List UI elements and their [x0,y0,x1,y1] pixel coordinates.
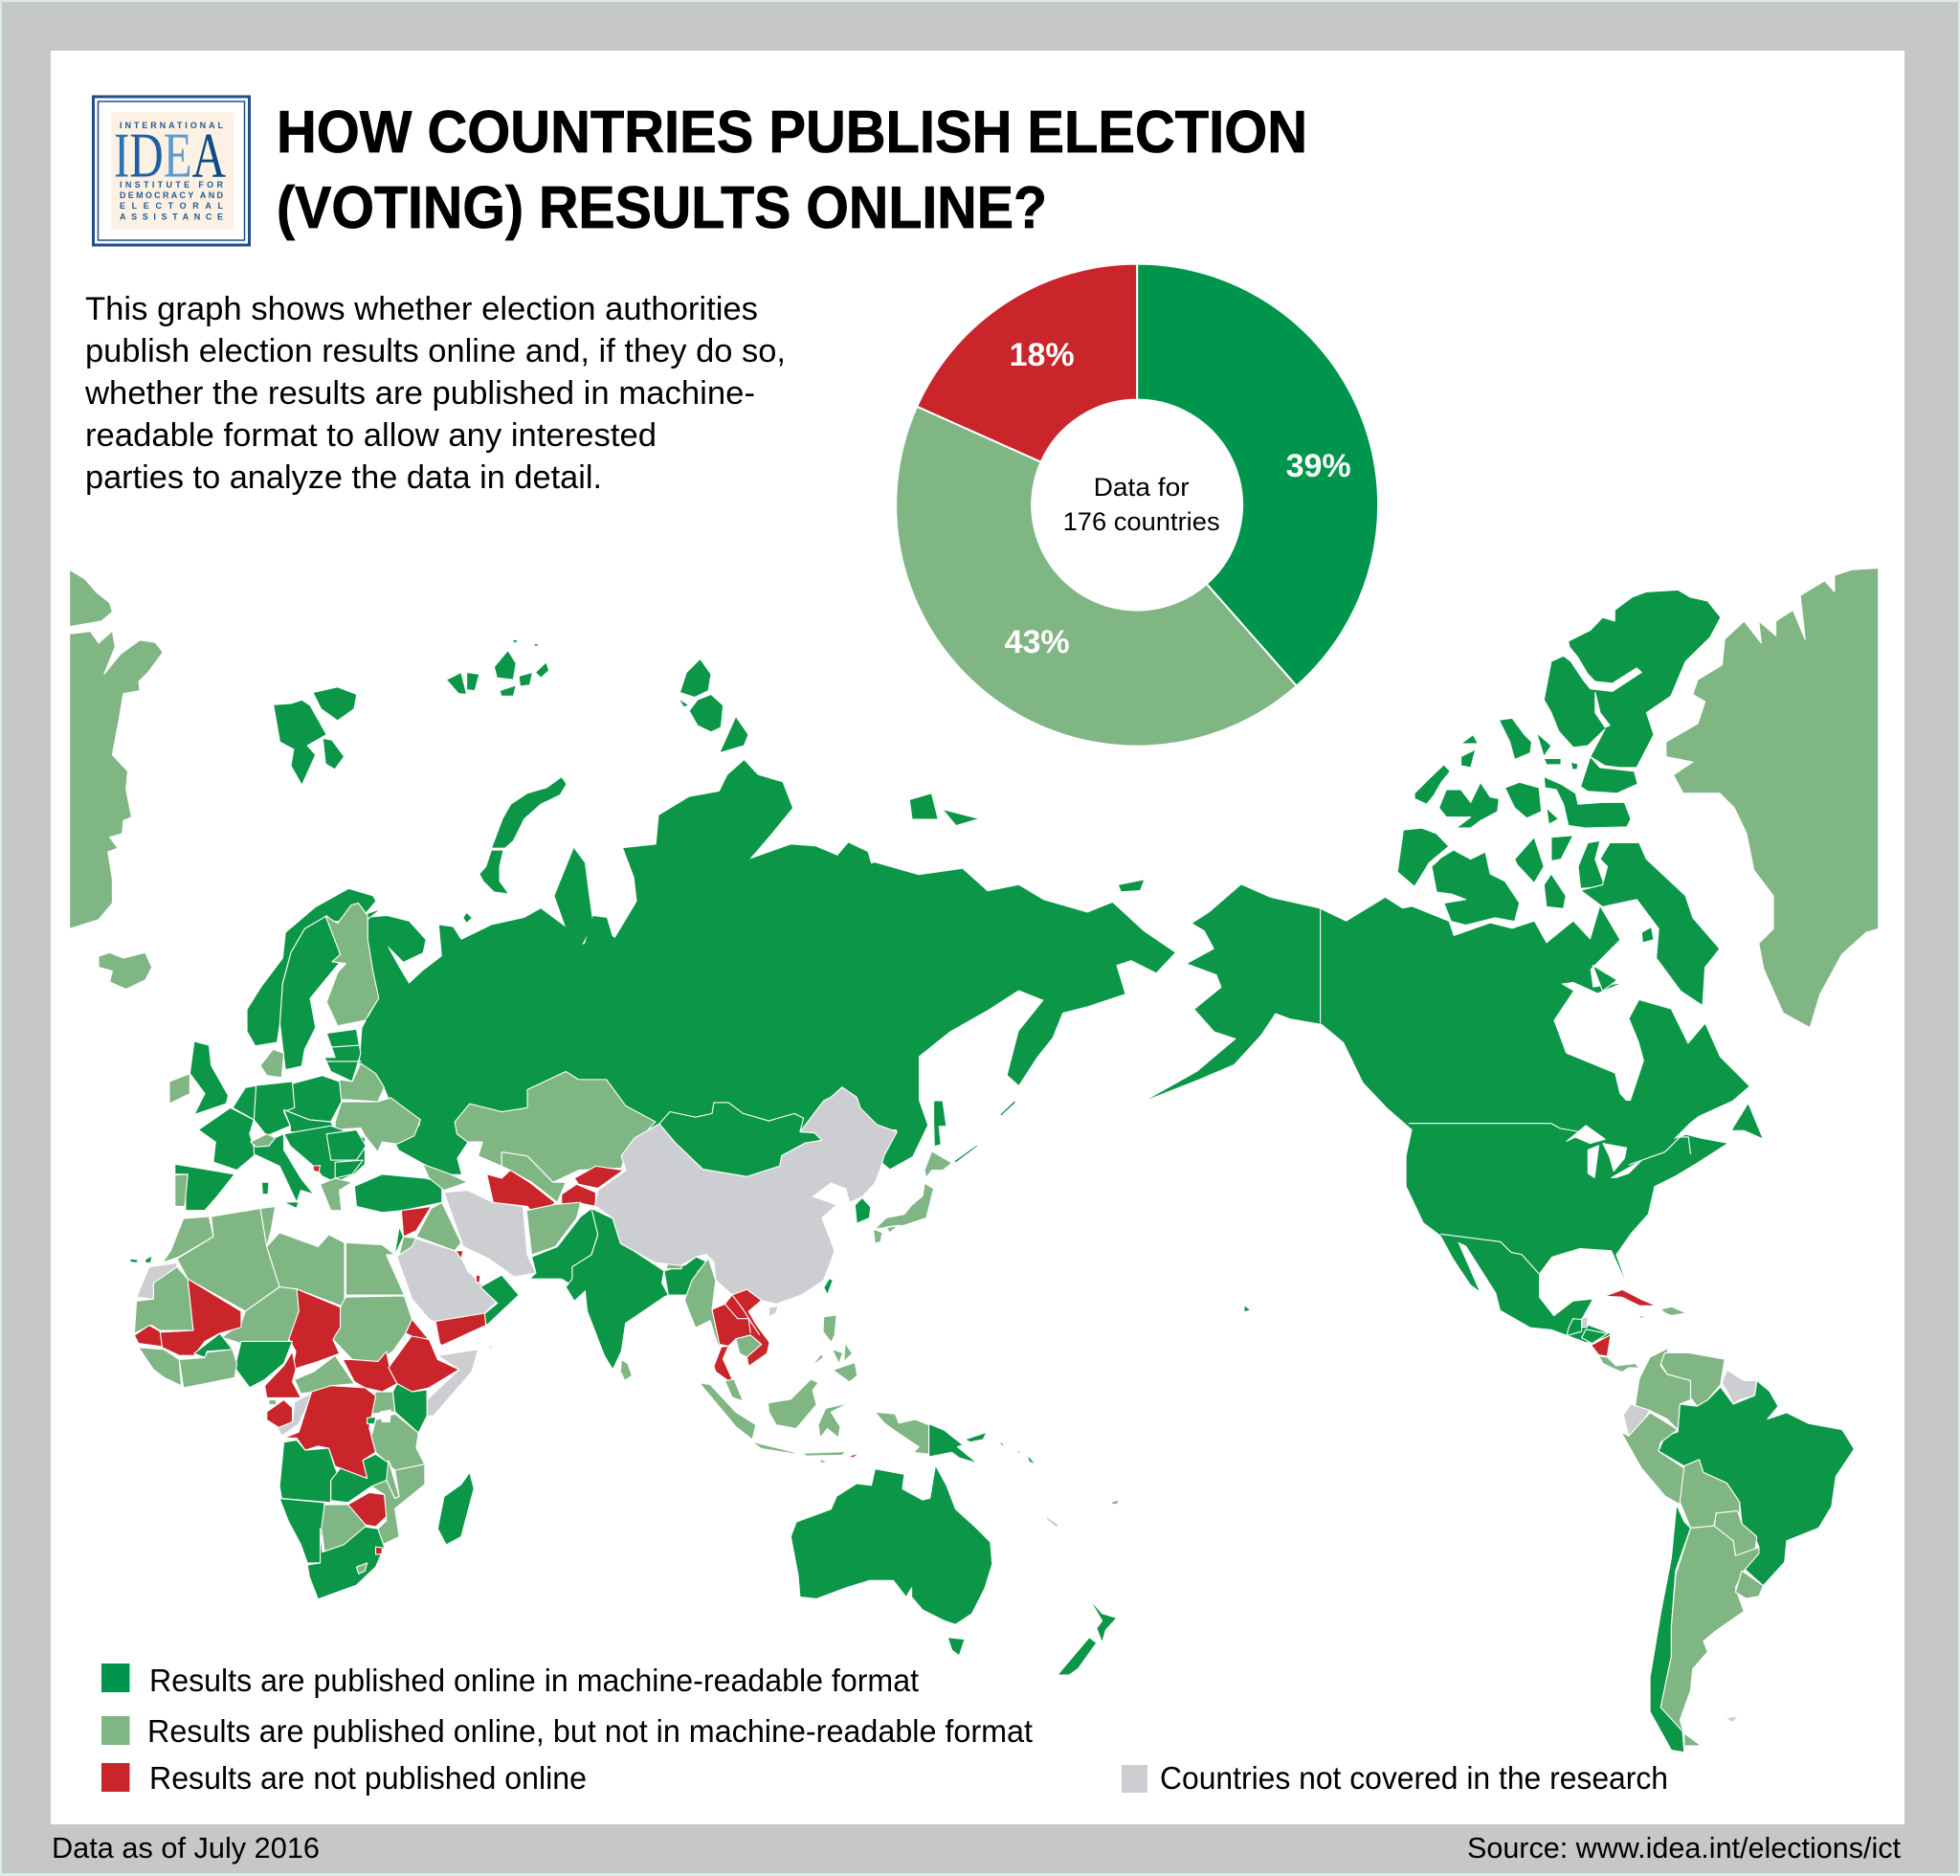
donut chart: publication shares [896,264,1378,747]
map: Canada and Alaska mainland [1148,884,1749,1129]
title: (VOTING) RESULTS ONLINE? [277,175,1047,241]
donut centre label: Data for [1094,473,1190,502]
footer: data date: Data as of July 2016 [52,1831,320,1865]
map: Southeast Asia [684,1259,1119,1528]
title: HOW COUNTRIES PUBLISH ELECTION [277,100,1307,166]
legend swatch: light green [101,1716,130,1745]
map: South Asia [529,1209,709,1380]
donut segment: 39% machine-readable [1137,264,1378,686]
map: Canadian Arctic islands [1397,590,1721,1006]
legend swatch: grey [1122,1765,1147,1793]
donut segment: 43% not machine-readable [896,407,1297,747]
intro text [84,291,786,496]
map: Russia [360,760,1175,1174]
map: Greenland, Canada and Alaska [1148,568,1879,1129]
map: Africa [130,1206,479,1599]
legend [101,1663,1668,1796]
donut value labels: 18% [1010,337,1075,373]
map: Europe [169,1029,420,1211]
donut centre label [1063,473,1220,536]
map: Mongolia [659,1103,822,1176]
map: United States, Central and South America [1244,1101,1854,1753]
logo: International IDEA: DEMOCRACY AND [120,190,224,200]
map: Middle East and Central Asia [354,1071,656,1348]
map: USA and Mexico [1244,1101,1763,1342]
map: Europe, Africa, Middle East and South Asia [130,1029,709,1599]
map: Korea, Japan, Taiwan and Sakhalin [824,1101,1016,1295]
legend swatch: dark green [101,1664,130,1692]
legend swatch: red [101,1763,130,1792]
donut centre label: 176 countries [1063,507,1220,536]
logo: International IDEA: INTERNATIONAL [120,121,224,130]
legend label: not published: Results are not published online [149,1760,587,1796]
map: East and Southeast Asia, Australia and Oceania [595,1087,1119,1675]
title [277,100,1307,241]
map: Greenland [1666,568,1879,1028]
intro text: readable format to allow any interested [85,417,657,454]
logo: International IDEA: IDEA [114,121,226,191]
map: Caribbean and Central America [1567,1289,1686,1372]
footer: source: Source: www.idea.int/elections/ict [1467,1831,1901,1865]
donut value labels: 43% [1005,624,1070,660]
legend label: not machine-readable: Results are published online, but not in machine-readable format [147,1713,1033,1749]
donut value labels: 39% [1286,448,1351,484]
legend label: not covered: Countries not covered in the research [1160,1760,1668,1796]
intro text: publish election results online and, if they do so, [85,333,786,369]
logo: International IDEA [94,97,249,245]
map: South America [1621,1348,1854,1753]
legend label: machine-readable: Results are published online in machine-readable format [149,1663,919,1698]
map: Australia and New Zealand [791,1465,1117,1675]
donut segment: 18% not published [917,264,1137,462]
logo: International IDEA: INSTITUTE FOR [120,180,224,190]
intro text: whether the results are published in machine- [84,375,755,412]
intro text: This graph shows whether election authorities [85,291,758,327]
intro text: parties to analyze the data in detail. [85,459,602,496]
donut value labels [1005,337,1351,660]
logo: International IDEA: ELECTORAL [120,201,224,211]
logo: International IDEA: ASSISTANCE [120,212,223,222]
map: China [595,1087,897,1317]
map: Greenland east edge, Iceland, Scandinavia and Arctic islands [70,570,748,1070]
world map [70,568,1879,1753]
